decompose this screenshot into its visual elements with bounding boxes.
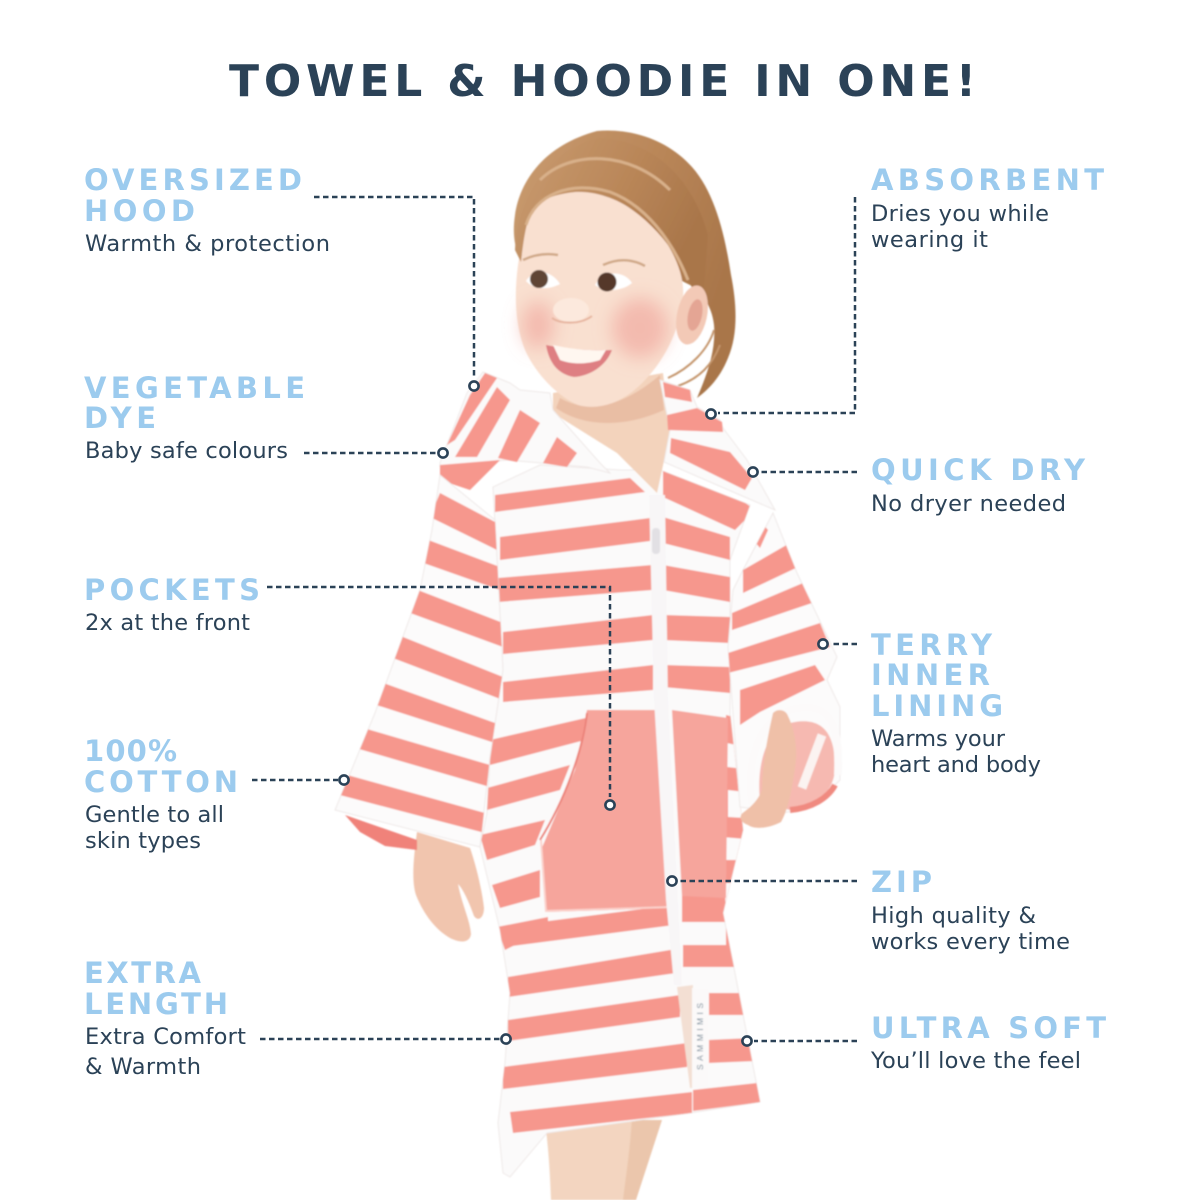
leader line: terry lining xyxy=(818,639,857,649)
face xyxy=(515,138,708,407)
callout: absorbent: wearing it xyxy=(871,227,988,253)
ear xyxy=(671,283,713,347)
callout: absorbent xyxy=(871,163,1104,253)
callout: oversized hood xyxy=(84,163,330,257)
callout: 100% cotton: Gentle to all xyxy=(85,802,224,828)
callout: ultra soft xyxy=(870,1011,1106,1074)
callout: zip: High quality & xyxy=(871,903,1036,929)
zip xyxy=(648,494,677,974)
callout: extra length: EXTRA xyxy=(84,956,202,990)
callout: 100% cotton xyxy=(84,734,238,854)
photo: child wearing striped hooded towel xyxy=(332,131,840,1200)
callout: vegetable dye xyxy=(84,371,305,464)
callout: quick dry xyxy=(871,453,1086,517)
hair highlights xyxy=(526,159,688,280)
eyes xyxy=(526,270,632,292)
left sleeve xyxy=(332,475,503,850)
callout: zip: works every time xyxy=(871,929,1070,955)
leader line: oversized hood xyxy=(314,197,479,391)
callout: oversized hood: HOOD xyxy=(84,194,195,228)
callout: vegetable dye: Baby safe colours xyxy=(85,438,288,464)
legs xyxy=(546,1118,662,1200)
callout: terry inner lining: heart and body xyxy=(871,752,1041,778)
callout: oversized hood: OVERSIZED xyxy=(84,163,302,197)
cheeks xyxy=(522,298,668,358)
chin shadow xyxy=(556,375,664,423)
callout: extra length: & Warmth xyxy=(85,1054,201,1080)
pockets xyxy=(540,710,728,912)
callout: 100% cotton: 100% xyxy=(84,734,177,768)
hair wisps xyxy=(668,330,720,386)
side slit and brand tag: SAMMIMIS xyxy=(695,1003,705,1070)
leader line: zip xyxy=(667,876,857,886)
callout: ultra soft: ULTRA SOFT xyxy=(871,1011,1106,1045)
hood left xyxy=(440,372,610,490)
callout: pockets: POCKETS xyxy=(84,573,260,607)
right hand xyxy=(741,710,796,828)
callout: absorbent: ABSORBENT xyxy=(871,163,1104,197)
hood right xyxy=(660,380,775,510)
callout: extra length xyxy=(84,956,246,1080)
left front stripes xyxy=(480,478,653,950)
callout: pockets: 2x at the front xyxy=(85,610,250,636)
neck xyxy=(553,373,670,493)
leader line: pockets xyxy=(267,587,615,810)
title: TOWEL & HOODIE IN ONE! xyxy=(229,56,976,107)
callout: quick dry: QUICK DRY xyxy=(871,453,1086,487)
callout: extra length: LENGTH xyxy=(84,987,228,1021)
callout: absorbent: Dries you while xyxy=(871,201,1049,227)
callout: 100% cotton: skin types xyxy=(85,828,201,854)
callout: terry inner lining xyxy=(871,628,1041,778)
callout: zip: ZIP xyxy=(871,865,932,899)
callout: zip xyxy=(871,865,1070,955)
leader line: vegetable dye xyxy=(304,448,448,458)
callout: vegetable dye: VEGETABLE xyxy=(84,371,305,405)
leader line: extra length xyxy=(260,1034,511,1044)
callout: oversized hood: Warmth & protection xyxy=(85,231,330,257)
leader line: ultra soft xyxy=(742,1036,857,1046)
callout: terry inner lining: LINING xyxy=(871,689,1003,723)
callout: terry inner lining: INNER xyxy=(871,658,990,692)
callout: terry inner lining: Warms your xyxy=(871,726,1006,752)
right sleeve xyxy=(728,510,840,813)
leader line: quick dry xyxy=(748,467,857,477)
robe body xyxy=(480,465,762,1177)
callout: extra length: Extra Comfort xyxy=(85,1024,246,1050)
lower stripes xyxy=(503,905,692,1133)
side slit and brand tag xyxy=(677,985,709,1088)
callout: 100% cotton: COTTON xyxy=(84,765,238,799)
leader line: absorbent xyxy=(706,197,855,419)
eyebrows xyxy=(523,254,645,266)
leader line: cotton xyxy=(252,775,349,785)
callout: quick dry: No dryer needed xyxy=(871,491,1066,517)
mouth xyxy=(546,345,612,377)
hair back xyxy=(514,131,736,398)
nose xyxy=(552,298,592,323)
callout: pockets xyxy=(84,573,260,636)
left hand xyxy=(413,832,484,941)
hair fringe xyxy=(515,138,708,290)
callout: ultra soft: You’ll love the feel xyxy=(870,1048,1081,1074)
right front stripes xyxy=(663,470,762,1111)
callout: vegetable dye: DYE xyxy=(84,401,156,435)
sleeve opening xyxy=(759,721,835,810)
callout: terry inner lining: TERRY xyxy=(871,628,993,662)
